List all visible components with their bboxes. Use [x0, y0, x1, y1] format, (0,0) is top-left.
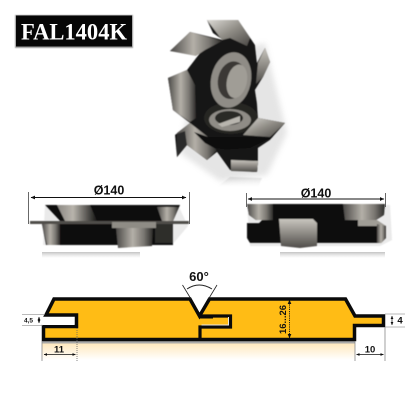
blade: lower left [177, 123, 217, 160]
blade: lower right [243, 118, 285, 137]
title badge: FAL1404K [15, 15, 133, 48]
left groove [42, 317, 74, 325]
dimension: 4,5 [22, 314, 45, 326]
title badge: FAL1404K: FAL1404K [21, 20, 127, 44]
blade: upper left [170, 32, 222, 56]
board shadow [42, 342, 355, 360]
dimension: 4: 4 [397, 316, 403, 326]
yellow profile outline [44, 299, 384, 340]
dimension: right diameter 140: Ø140 [301, 186, 331, 200]
dimension: 10 [355, 327, 385, 361]
dimension: 11: 11 [54, 344, 65, 356]
dimension: left diameter 140 [28, 184, 190, 224]
lower disc [204, 102, 258, 134]
dimension: 11 [42, 328, 77, 361]
dimension: left diameter 140: Ø140 [94, 184, 124, 198]
lower block [215, 148, 258, 172]
cutter silhouette [168, 20, 285, 172]
dimension: 60 degrees [182, 269, 217, 299]
boss [279, 219, 317, 248]
reflection [217, 177, 262, 187]
dimension: 4 [385, 314, 405, 327]
cutter ring and bore [206, 48, 256, 112]
V groove [191, 297, 208, 312]
board profile [22, 269, 405, 361]
reflection under right photo [280, 252, 385, 258]
boss [112, 222, 156, 248]
lower black body [194, 132, 273, 150]
blade: top [207, 20, 250, 46]
dimension: 60 degrees: 60° [189, 269, 209, 284]
blade: left [168, 70, 196, 122]
left side photo [28, 184, 190, 258]
photo: cutter head assembly [168, 20, 287, 187]
dimension: 4,5: 4,5 [24, 318, 33, 324]
dimension: right diameter 140 [246, 186, 386, 207]
blade: right [256, 48, 270, 84]
tongue and groove joint [199, 316, 230, 340]
dimension: 16...26: 16...26 [278, 305, 289, 334]
reflection under left photo [42, 252, 140, 258]
dimension: 10: 10 [365, 344, 375, 356]
right side photo [246, 186, 392, 258]
